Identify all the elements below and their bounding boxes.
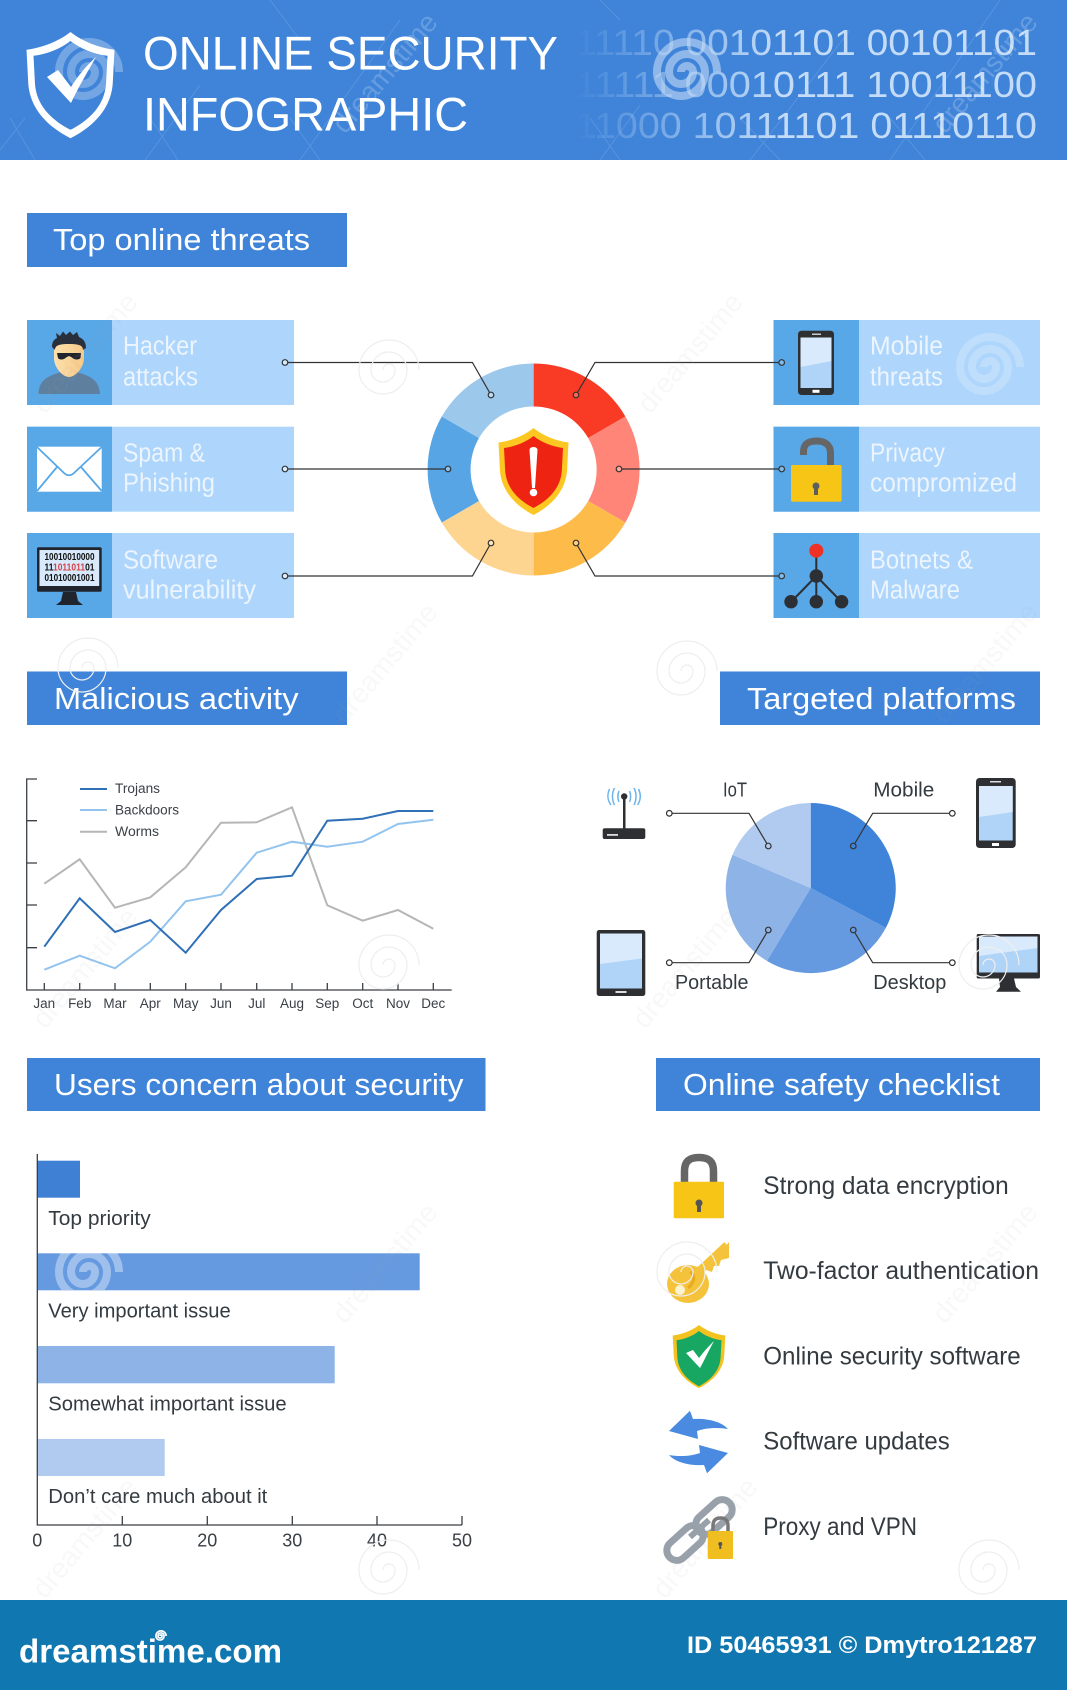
panel: botnets and malware (774, 533, 1040, 618)
legend: Backdoors (115, 802, 179, 818)
axis values: 20 (197, 1531, 217, 1551)
panel: software vulnerability (27, 533, 294, 618)
panel: hacker attacks (27, 320, 294, 405)
month labels: Feb (68, 996, 91, 1011)
heading: Users concern about security (27, 1058, 486, 1111)
icon: monitor with binary code (37, 547, 102, 605)
month labels (33, 996, 446, 1011)
icon: monitor with binary code: 11101101101 (44, 563, 95, 574)
text: dreamstime (646, 1472, 764, 1604)
text: dreamstime (631, 287, 749, 419)
label: Mobile threats (870, 332, 943, 392)
label: Privacy compromized: compromized (870, 470, 1017, 498)
heading: Online safety checklist: Online safety checklist (683, 1067, 1000, 1102)
title: INFOGRAPHIC (143, 88, 468, 140)
month labels: Apr (140, 996, 161, 1011)
heading: Online safety checklist (656, 1058, 1040, 1111)
month labels: Jun (210, 996, 232, 1011)
pie labels (675, 780, 946, 994)
item: online security software (673, 1325, 1021, 1388)
label: Privacy compromized (870, 440, 1017, 498)
bar: top priority: Top priority (48, 1208, 151, 1230)
legend: Worms (115, 824, 159, 839)
text: dreamstime (26, 902, 144, 1034)
bar: somewhat important issue (37, 1346, 335, 1416)
panel: privacy compromized (774, 427, 1040, 512)
legend (80, 781, 179, 839)
label: Privacy compromized: Privacy (870, 440, 945, 468)
bar: don't care much about it (37, 1439, 268, 1508)
footer brand: dreamstime.com (19, 1632, 282, 1670)
label: Botnets and Malware: Botnets & (870, 546, 973, 574)
bar: top priority (37, 1161, 151, 1230)
icon: chain with lock (663, 1496, 736, 1564)
line chart: malicious activity (27, 779, 452, 1011)
icon: botnet network (784, 544, 848, 608)
legend: Trojans (115, 781, 160, 796)
line: trojans (44, 811, 433, 953)
axis values: 30 (282, 1531, 302, 1551)
icon: hacker (38, 332, 100, 394)
icon: header shield with check (26, 32, 119, 138)
item: strong data encryption: Strong data encryption (763, 1172, 1009, 1200)
icon: IoT router (603, 788, 645, 839)
binary decoration: 11000 10111101 01110110 (575, 105, 1037, 146)
month labels: Sep (315, 996, 339, 1011)
icon: footer spiral (156, 1631, 166, 1640)
label: Spam and Phishing: Spam & (123, 440, 205, 468)
label: Software vulnerability: Software (123, 546, 218, 574)
axis values: 0 (32, 1531, 42, 1551)
axis values: 10 (112, 1531, 132, 1551)
icon: alert shield (498, 428, 568, 515)
item: proxy and VPN: Proxy and VPN (763, 1513, 917, 1541)
month labels: Dec (421, 996, 446, 1011)
text: dreamstime (326, 7, 444, 139)
icon: padlock (674, 1158, 724, 1218)
axis values (32, 1531, 472, 1551)
footer bar (0, 1600, 1067, 1690)
heading: Top online threats (27, 213, 347, 267)
label: Hacker attacks: Hacker (123, 332, 197, 360)
icon: green shield (673, 1325, 725, 1388)
line: worms (44, 807, 433, 929)
panel: mobile threats (774, 320, 1040, 405)
bar: very important issue (38, 1253, 420, 1322)
text: dreamstime (926, 7, 1044, 139)
icon: key (667, 1242, 729, 1303)
label: Mobile threats: Mobile (870, 332, 943, 360)
pie leader lines (666, 810, 955, 966)
month labels: Mar (103, 996, 127, 1011)
text: dreamstime (326, 597, 444, 729)
header banner (0, 0, 1067, 160)
label: Botnets and Malware: Malware (870, 576, 960, 604)
month labels: May (173, 996, 199, 1011)
heading: Malicious activity (27, 672, 347, 725)
item: two-factor authentication (667, 1242, 1039, 1303)
month labels: Oct (352, 996, 373, 1011)
text: dreamstime (926, 1197, 1044, 1329)
label: Software vulnerability: vulnerability (123, 576, 256, 604)
bar: somewhat important issue: Somewhat important issue (48, 1394, 287, 1416)
chart axes (37, 1154, 462, 1525)
item: two-factor authentication: Two-factor authentication (763, 1257, 1039, 1285)
text: dreamstime (626, 902, 744, 1034)
label: Mobile threats: threats (870, 364, 943, 392)
pie labels: Portable (675, 972, 748, 994)
binary decoration: 11110 00101101 00101101 (575, 22, 1037, 63)
icon: portable tablet (597, 930, 645, 996)
item: strong data encryption (674, 1158, 1009, 1218)
pie labels: Mobile (873, 780, 934, 802)
item: proxy and VPN (663, 1496, 917, 1564)
icon: mobile phone (976, 778, 1016, 848)
text: dreamstime (926, 597, 1044, 729)
month labels: Nov (386, 996, 410, 1011)
donut chart: threats (428, 363, 640, 576)
pie chart: targeted platforms (726, 803, 896, 973)
heading: Targeted platforms: Targeted platforms (747, 681, 1016, 716)
axis values: 40 (367, 1531, 387, 1551)
label: Spam and Phishing (123, 440, 215, 498)
heading: Users concern about security: Users concern about security (54, 1067, 464, 1102)
item: software updates (669, 1411, 950, 1473)
pie labels: IoT (723, 780, 747, 802)
label: Software vulnerability (123, 546, 256, 604)
label: Spam and Phishing: Phishing (123, 470, 215, 498)
text: dreamstime (26, 287, 144, 419)
bar: don't care much about it: Don’t care much about it (48, 1486, 268, 1508)
checklist (663, 1158, 1039, 1564)
text: dreamstime (326, 1197, 444, 1329)
heading: Malicious activity: Malicious activity (54, 681, 299, 716)
heading: Top online threats: Top online threats (53, 222, 310, 257)
binary decoration (575, 22, 1037, 146)
bar chart: users concern (32, 1154, 472, 1551)
text: dreamstime (26, 1472, 144, 1604)
title: ONLINE SECURITY (143, 26, 558, 80)
label: Hacker attacks: attacks (123, 364, 198, 392)
bar: very important issue: Very important issue (48, 1301, 231, 1323)
item: software updates: Software updates (763, 1428, 950, 1456)
title (143, 26, 558, 140)
axis values: 50 (452, 1531, 472, 1551)
month labels: Jan (33, 996, 55, 1011)
icon: envelope (37, 447, 102, 492)
label: Botnets and Malware (870, 546, 973, 604)
icon: monitor with binary code: 10010010000 (44, 552, 95, 563)
connectors: threats to donut (282, 360, 784, 579)
icon: open padlock (791, 441, 842, 502)
icon: desktop monitor (977, 934, 1040, 992)
footer credit: ID 50465931 © Dmytro121287 (687, 1632, 1037, 1659)
pie labels: Desktop (873, 972, 946, 994)
chart axes (27, 779, 452, 990)
label: Hacker attacks (123, 332, 198, 392)
panel: spam and phishing (27, 427, 294, 512)
binary decoration: 11111 00010111 10011100 (575, 64, 1037, 105)
line: backdoors (44, 820, 433, 970)
heading: Targeted platforms (720, 672, 1040, 725)
icon: monitor with binary code: 01010001001 (44, 573, 95, 584)
icon: smartphone (798, 331, 834, 395)
month labels: Aug (280, 996, 304, 1011)
month labels: Jul (248, 996, 265, 1011)
icon: refresh arrows (669, 1411, 728, 1473)
item: online security software: Online security software (763, 1342, 1021, 1370)
